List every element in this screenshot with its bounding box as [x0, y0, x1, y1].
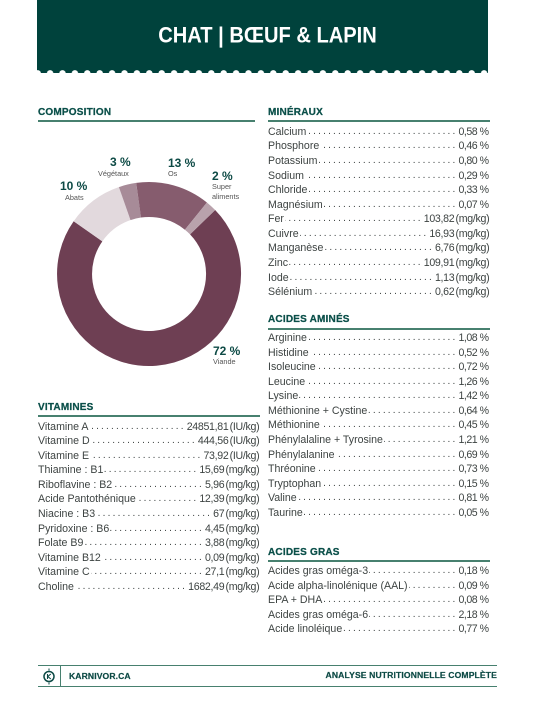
table: minéraux: Manganèse: [268, 242, 323, 254]
table: acides aminés: [268, 332, 489, 519]
table: acides gras: [268, 565, 489, 635]
banner: CHAT | BŒUF & LAPIN: [158, 23, 377, 48]
table: acides aminés: Histidine: [268, 347, 309, 359]
table: minéraux: Cuivre: [268, 228, 299, 240]
table: acides gras: Acides gras oméga-6: [268, 609, 368, 621]
table: vitamines: 67 (mg/kg): [213, 508, 259, 520]
table: vitamines: Vitamine E: [38, 450, 89, 462]
table: minéraux: Iode: [268, 272, 289, 284]
table: minéraux: Fer: [268, 213, 284, 225]
table: vitamines: Vitamine C: [38, 566, 90, 578]
table: acides gras: EPA + DHA: [268, 594, 322, 606]
table: acides aminés: 1,42 %: [459, 390, 488, 402]
table: acides gras: Acide linoléique: [268, 623, 342, 635]
table: acides aminés: Tryptophan: [268, 478, 321, 490]
table: minéraux: 0,62 (mg/kg): [435, 286, 489, 298]
table: vitamines: 3,88 (mg/kg): [205, 537, 259, 549]
table: acides aminés: Méthionine + Cystine: [268, 405, 367, 417]
table: acides aminés: 1,08 %: [459, 332, 488, 344]
table: minéraux: 0,29 %: [459, 170, 488, 182]
table: vitamines: 15,69 (mg/kg): [199, 464, 259, 476]
table: minéraux: 0,07 %: [459, 199, 488, 211]
table: acides aminés: Valine: [268, 492, 297, 504]
text: 2 %: [212, 169, 233, 183]
table: vitamines: Pyridoxine : B6: [38, 523, 109, 535]
table: acides gras: 0,77 %: [459, 623, 488, 635]
table: vitamines: Acide Pantothénique: [38, 493, 136, 505]
text: Super: [212, 182, 231, 191]
table: acides gras: Acides gras oméga-3: [268, 565, 368, 577]
table: acides aminés: 0,64 %: [459, 405, 488, 417]
table: acides aminés: 1,26 %: [459, 376, 488, 388]
table: acides aminés: 0,72 %: [459, 361, 488, 373]
table: acides aminés: 0,69 %: [459, 449, 488, 461]
text: Abats: [65, 193, 84, 202]
table: minéraux: Sodium: [268, 170, 304, 182]
table: acides aminés: 1,21 %: [459, 434, 488, 446]
footer caption: ANALYSE NUTRITIONNELLE COMPLÈTE: [326, 670, 497, 680]
table: minéraux: Phosphore: [268, 140, 319, 152]
table: vitamines: Vitamine B12: [38, 552, 101, 564]
table: acides aminés: Taurine: [268, 507, 303, 519]
table: minéraux: Calcium: [268, 126, 306, 138]
donut chart: composition: [57, 182, 242, 366]
table: minéraux: Magnésium: [268, 199, 323, 211]
table: vitamines: Niacine : B3: [38, 508, 95, 520]
table: acides aminés: 0,05 %: [459, 507, 488, 519]
table: acides gras: Acide alpha-linolénique (AAL): [268, 580, 408, 592]
text: Végétaux: [98, 169, 129, 178]
table: vitamines: 5,96 (mg/kg): [205, 479, 259, 491]
table: vitamines: Vitamine D: [38, 435, 90, 447]
table: minéraux: 0,58 %: [459, 126, 488, 138]
table: vitamines: Folate B9: [38, 537, 83, 549]
table: vitamines: 12,39 (mg/kg): [199, 493, 259, 505]
text: 3 %: [110, 155, 131, 169]
table: minéraux: Zinc: [268, 257, 288, 269]
table: vitamines: 4,45 (mg/kg): [205, 523, 259, 535]
table: vitamines: [38, 420, 259, 593]
table: acides aminés: Méthionine: [268, 419, 320, 431]
donut labels: 10 %: [60, 179, 87, 193]
table: acides aminés: Thréonine: [268, 463, 316, 475]
table: acides aminés: Isoleucine: [268, 361, 316, 373]
heading: acides gras: ACIDES GRAS: [268, 547, 340, 558]
table: vitamines: 73,92 (IU/kg): [203, 450, 259, 462]
table: acides aminés: 0,81 %: [459, 492, 488, 504]
table: acides aminés: Phénylalaline + Tyrosine: [268, 434, 383, 446]
heading: acides aminés: ACIDES AMINÉS: [268, 314, 350, 325]
table: acides gras: 0,18 %: [459, 565, 488, 577]
table: acides aminés: Arginine: [268, 332, 307, 344]
table: acides aminés: Phénylalanine: [268, 449, 335, 461]
table: minéraux: 0,46 %: [459, 140, 488, 152]
table: minéraux: [268, 126, 489, 298]
table: acides aminés: 0,45 %: [459, 419, 488, 431]
table: minéraux: Potassium: [268, 155, 317, 167]
heading: vitamines: VITAMINES: [38, 402, 94, 413]
table: vitamines: Choline: [38, 581, 74, 593]
table: acides gras: 0,09 %: [459, 580, 488, 592]
table: vitamines: 444,56 (IU/kg): [198, 435, 259, 447]
table: acides aminés: 0,52 %: [459, 347, 488, 359]
text: Viande: [213, 357, 236, 366]
table: minéraux: 1,13 (mg/kg): [435, 272, 489, 284]
table: vitamines: 27,1 (mg/kg): [205, 566, 259, 578]
table: vitamines: Vitamine A: [38, 420, 88, 432]
table: minéraux: 0,80 %: [459, 155, 488, 167]
table: minéraux: Sélénium: [268, 286, 312, 298]
table: minéraux: 103,82 (mg/kg): [424, 213, 489, 225]
table: acides aminés: Leucine: [268, 376, 305, 388]
table: acides aminés: Lysine: [268, 390, 298, 402]
table: vitamines: Thiamine : B1: [38, 464, 103, 476]
table: acides aminés: 0,73 %: [459, 463, 488, 475]
table: vitamines: 0,09 (mg/kg): [205, 552, 259, 564]
text: 72 %: [213, 344, 240, 358]
text: 13 %: [168, 156, 195, 170]
table: minéraux: 0,33 %: [459, 184, 488, 196]
text: Os: [168, 169, 177, 178]
table: acides aminés: 0,15 %: [459, 478, 488, 490]
table: vitamines: 1682,49 (mg/kg): [188, 581, 259, 593]
table: acides gras: 0,08 %: [459, 594, 488, 606]
table: minéraux: Chloride: [268, 184, 307, 196]
footer: [38, 665, 497, 687]
footer divider: [60, 665, 61, 686]
icon: karnivor logo: [43, 668, 55, 684]
footer website: KARNIVOR.CA: [69, 671, 131, 681]
table: vitamines: 24851,81 (IU/kg): [187, 420, 259, 432]
table: acides gras: 2,18 %: [459, 609, 488, 621]
banner: [37, 0, 488, 73]
heading: minéraux: MINÉRAUX: [268, 107, 323, 118]
table: minéraux: 16,93 (mg/kg): [429, 228, 489, 240]
table: minéraux: 109,91 (mg/kg): [424, 257, 489, 269]
table: minéraux: 6,76 (mg/kg): [435, 242, 489, 254]
heading: composition: COMPOSITION: [38, 107, 111, 118]
text: aliments: [212, 192, 239, 201]
table: vitamines: Riboflavine : B2: [38, 479, 112, 491]
